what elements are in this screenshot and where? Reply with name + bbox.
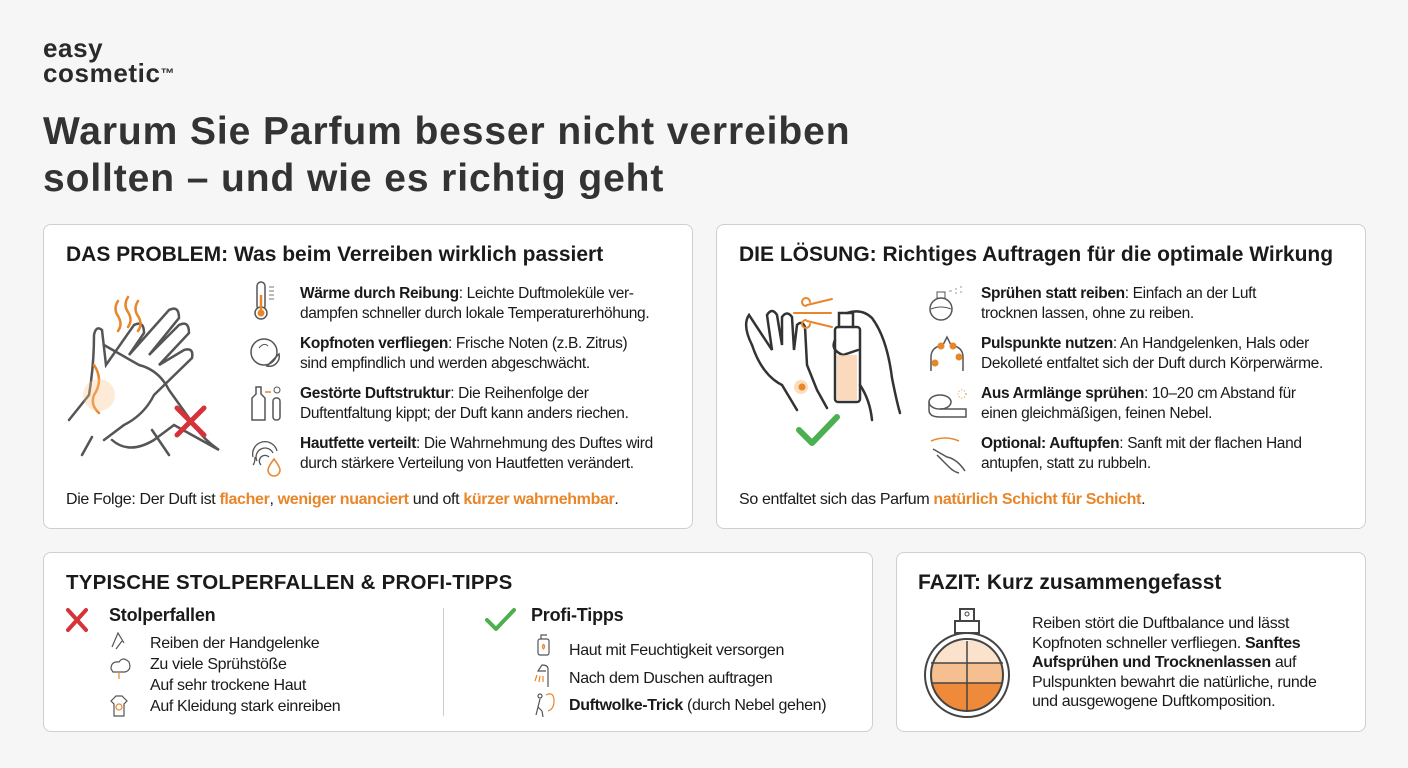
column: pro tips [484, 605, 826, 718]
item: top notes: Kopfnoten verfliegen: Frische Noten (z.B. Zitrus) [300, 335, 627, 352]
result line: So entfaltet sich das Parfum natürlich Schicht für Schicht. [739, 491, 1145, 508]
icon: fingerprint [252, 441, 281, 477]
column: pitfalls: Reiben der Handgelenke [150, 635, 319, 652]
title: sollten – und wie es richtig geht [43, 157, 664, 200]
item: skin oils: durch stärkere Verteilung von Hautfetten verändert. [300, 454, 634, 472]
icon: tape measure [928, 390, 967, 418]
logo [43, 33, 175, 88]
column: pro tips: Duftwolke-Trick (durch Nebel gehen) [569, 697, 826, 714]
conclusion text: Reiben stört die Duftbalance und lässt [1032, 615, 1289, 632]
logo: easy [43, 33, 103, 63]
item: structure: Duftentfaltung kippt; der Duft kann anders riechen. [300, 404, 629, 422]
icon: layered perfume bottle [924, 608, 1010, 718]
illustration: rubbing hands [68, 296, 220, 456]
icon: perfume spray [929, 286, 962, 321]
column: pitfalls: Auf Kleidung stark einreiben [150, 698, 340, 715]
item: arm length: Aus Armlänge sprühen: 10–20 cm Abstand für [981, 385, 1296, 402]
column: pro tips: Nach dem Duschen auftragen [569, 670, 772, 686]
item: top notes: sind empfindlich und werden abgeschwächt. [300, 354, 590, 372]
item: heat: dampfen schneller durch lokale Temperaturerhöhung. [300, 304, 649, 322]
icon: pulse points [930, 336, 964, 371]
divider [443, 608, 444, 716]
panel: problem [43, 224, 693, 529]
item: spray: Sprühen statt reiben: Einfach an der Luft [981, 285, 1256, 302]
column: pitfalls: Zu viele Sprühstöße [150, 656, 287, 673]
heading: solution: DIE LÖSUNG: Richtiges Auftragen für die optimale Wirkung [739, 243, 1333, 266]
heading: conclusion: FAZIT: Kurz zusammengefasst [918, 571, 1221, 594]
green check [799, 417, 837, 443]
item: arm length: einen gleichmäßigen, feinen Nebel. [981, 404, 1212, 422]
item: skin oils [300, 435, 653, 472]
item: pulse [981, 335, 1323, 372]
item: heat: Wärme durch Reibung: Leichte Duftmoleküle ver- [300, 285, 634, 302]
icon: bottles [251, 386, 281, 421]
panel: solution [716, 224, 1366, 529]
illustration: spraying wrist [744, 297, 902, 446]
item: arm length [981, 385, 1296, 422]
icon: green check [484, 608, 516, 632]
icon: citrus [250, 338, 280, 367]
item: skin oils: Hautfette verteilt: Die Wahrnehmung des Duftes wird [300, 435, 653, 452]
item: spray [981, 285, 1256, 322]
column: pitfalls [66, 605, 340, 717]
icon: red x [66, 608, 88, 632]
item: structure [300, 385, 629, 422]
item: dabbing: Optional: Auftupfen: Sanft mit der flachen Hand [981, 435, 1302, 452]
conclusion text: und ausgewogene Duftkomposition. [1032, 693, 1275, 710]
item: structure: Gestörte Duftstruktur: Die Reihenfolge der [300, 385, 589, 402]
conclusion text: Aufsprühen und Trocknenlassen auf [1032, 654, 1296, 671]
title [43, 110, 850, 200]
conclusion text: Pulspunkten bewahrt die natürliche, runde [1032, 674, 1317, 691]
title: Warum Sie Parfum besser nicht verreiben [43, 110, 850, 153]
item: top notes [300, 335, 627, 372]
consequence: Die Folge: Der Duft ist flacher, weniger nuanciert und oft kürzer wahrnehmbar. [66, 491, 619, 508]
icon: thermometer [254, 281, 274, 320]
panel: conclusion [896, 552, 1366, 732]
column: pitfalls: Auf sehr trockene Haut [150, 677, 306, 694]
heading: pitfalls: TYPISCHE STOLPERFALLEN & PROFI-TIPPS [66, 571, 512, 594]
conclusion text: Kopfnoten schneller verfliegen. Sanftes [1032, 635, 1300, 652]
item: pulse: Dekolleté entfaltet sich der Duft durch Körperwärme. [981, 354, 1323, 372]
item: spray: trocknen lassen, ohne zu reiben. [981, 304, 1194, 322]
heading: problem: DAS PROBLEM: Was beim Verreiben wirklich passiert [66, 243, 603, 266]
item: pulse: Pulspunkte nutzen: An Handgelenken, Hals oder [981, 335, 1309, 352]
icon: dabbing hand [930, 437, 966, 474]
panel: pitfalls & tips [43, 552, 873, 732]
column: pro tips: Profi-Tipps [531, 605, 623, 625]
item: dabbing: antupfen, statt zu rubbeln. [981, 454, 1151, 472]
column: pro tips: Haut mit Feuchtigkeit versorgen [569, 642, 784, 659]
column: pitfalls: Stolperfallen [109, 605, 215, 625]
item: heat [300, 285, 649, 322]
item: dabbing [981, 435, 1302, 472]
red x [177, 408, 204, 435]
conclusion text [1032, 615, 1317, 710]
logo: cosmetic™ [43, 58, 175, 88]
